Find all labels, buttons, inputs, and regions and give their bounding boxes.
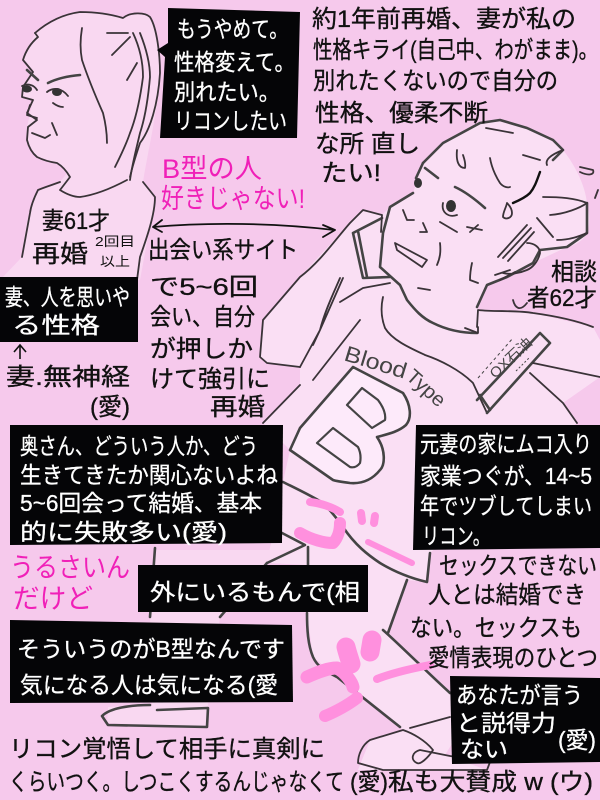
arrow: double-headed — [153, 220, 335, 237]
text: dating site: が押しか — [150, 336, 253, 363]
text: consultation summary: 約1年前再婚、妻が私の — [312, 6, 576, 33]
heading: B型の人好きじゃない — [161, 154, 305, 214]
text: closing advice: くらいつく。しつこくするんじゃなくて — [9, 769, 344, 796]
callout: what kind of person: 生きてきたか関心ないよね — [20, 462, 278, 488]
text: consultation summary: な所 直し — [315, 131, 420, 158]
text: sex and marriage: ない。セックスも — [410, 615, 582, 642]
icon: husband face — [395, 168, 485, 290]
heading: B型の人好きじゃない: 好きじゃない! — [161, 184, 305, 214]
text: Blood Type shirt label — [342, 341, 450, 412]
callout: that's type B: そういうのがB型なんです — [17, 636, 285, 662]
text: pink aside: だけど — [13, 584, 93, 614]
text: sex and marriage — [410, 553, 598, 672]
illustration: husband — [102, 120, 600, 770]
speech bubble: wife: 性格変えて。 — [174, 49, 295, 75]
text: dating site: けて強引に — [150, 366, 270, 393]
text: wife label: 再婚 — [32, 241, 88, 268]
speech bubble: wife: 別れたい。 — [174, 79, 280, 105]
text: OX oil sleeve label: OX石油 — [486, 334, 535, 381]
callout: what kind of person: 的に失敗多い(愛) — [20, 519, 227, 545]
callout: what kind of person — [10, 425, 283, 545]
text: sex and marriage: 人とは結婚でき — [428, 582, 586, 609]
text: pink aside: うるさいん — [10, 553, 130, 583]
text: pink aside — [10, 553, 130, 614]
callout: outside: 外にいるもんで(相 — [150, 579, 360, 605]
text: dating site: 会い、自分 — [150, 304, 255, 331]
callout: you saying it: (愛) — [558, 727, 596, 753]
text: consultation summary — [312, 6, 598, 187]
text: dating site — [148, 237, 298, 421]
callout: you saying it: ない — [460, 736, 508, 762]
text: wife label: 妻61才 — [42, 208, 110, 235]
callout: outside — [138, 565, 368, 612]
speech bubble: wife: もうやめて。 — [177, 16, 288, 42]
icon: wife face — [22, 70, 80, 138]
speech bubble: wife — [157, 8, 300, 138]
illustration: back leg — [107, 547, 308, 727]
callout: wife's character — [0, 277, 138, 342]
callout: you saying it: あなたが言う — [456, 682, 583, 708]
text: closing advice: (愛) — [350, 769, 388, 796]
callout: that's type B — [10, 620, 293, 703]
text: consultation summary: 別れたくないので自分の — [313, 68, 558, 95]
text: consultant age — [527, 259, 597, 312]
icon: phone — [353, 218, 390, 278]
arrow: up — [14, 345, 26, 359]
speech bubble: wife: リコンしたい — [174, 108, 287, 134]
callout: you saying it — [450, 676, 600, 764]
text: wife insensitive — [6, 364, 130, 421]
callout: wife's character: る性格 — [12, 312, 100, 338]
callout: ex-wife family business — [413, 425, 600, 550]
text: consultant age: 者62才 — [527, 285, 597, 312]
text: Blood Type shirt label: Type — [402, 365, 450, 412]
text: closing advice: 私も大賛成 w (ウ) — [388, 769, 593, 796]
text: consultant age: 相談 — [551, 259, 597, 286]
text: closing advice: リコン覚悟して相手に真剣に — [9, 736, 325, 763]
text: dating site: 出会い系サイト — [148, 237, 298, 264]
text: dating site: で5~6回 — [150, 274, 258, 301]
callout: what kind of person: 5~6回会って結婚、基本 — [20, 490, 262, 516]
text: consultation summary: 性格、優柔不断 — [315, 100, 488, 127]
text: closing advice — [9, 736, 593, 796]
text: wife label: 以上 — [100, 254, 130, 269]
callout: what kind of person: 奥さん、どういう人か、どう — [20, 433, 258, 459]
icon: pink motion strokes — [300, 502, 430, 716]
text: dating site: 再婚 — [210, 394, 265, 421]
heading: B型の人好きじゃない: B型の人 — [162, 154, 262, 184]
callout: that's type B: 気になる人は気になる(愛 — [20, 672, 278, 698]
text: wife insensitive: 妻.無神経 — [6, 364, 130, 391]
illustration: wife — [0, 12, 160, 280]
callout: ex-wife family business: リコン。 — [422, 523, 490, 549]
text: wife label — [32, 208, 135, 269]
text: wife insensitive: (愛) — [90, 394, 130, 421]
text: wife label: 2回目 — [95, 234, 135, 249]
callout: wife's character: 妻、人を思いや — [5, 284, 130, 310]
icon: shoe — [358, 717, 490, 770]
icon: letter B on shirt — [290, 367, 410, 483]
callout: you saying it: と説得力 — [456, 710, 556, 736]
text: consultation summary: たい! — [321, 160, 381, 187]
text: Blood Type shirt label: Blood — [342, 341, 410, 383]
